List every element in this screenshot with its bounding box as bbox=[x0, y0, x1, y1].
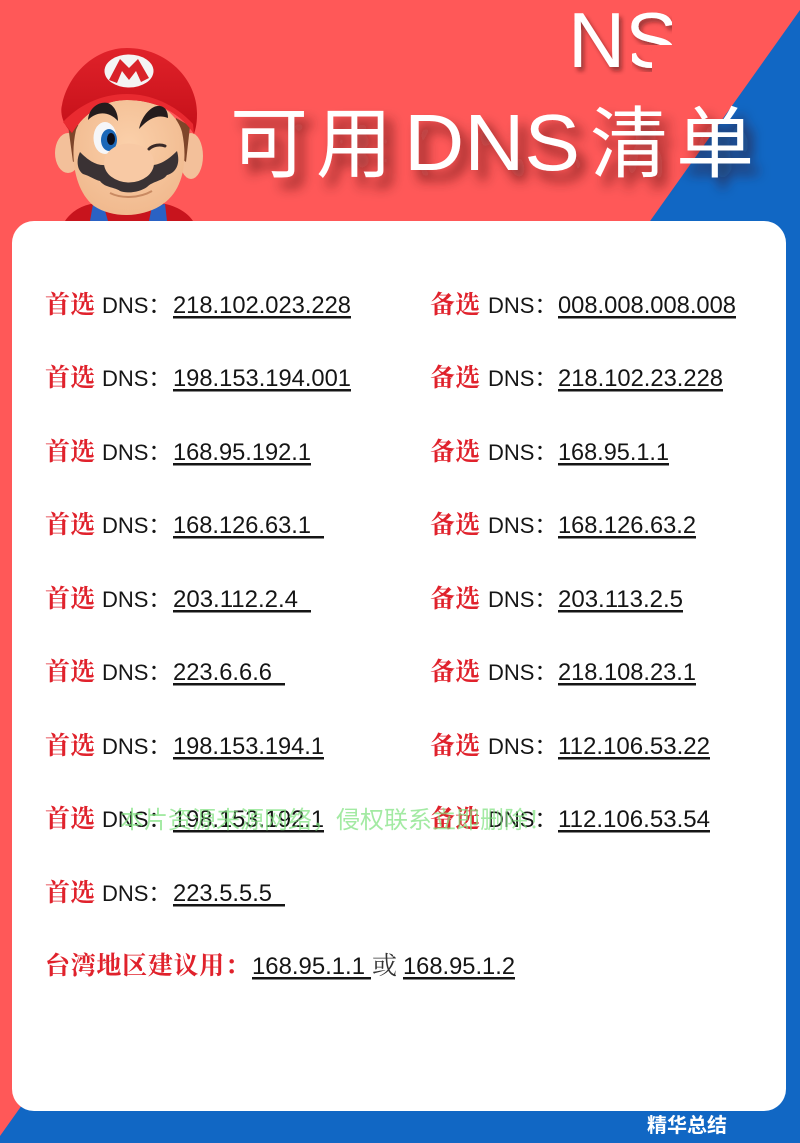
row 9: 223.5.5.5 bbox=[173, 880, 272, 907]
row 5 bbox=[45, 585, 683, 613]
row 2: 198.153.194.001 bbox=[173, 365, 351, 392]
Mario body bbox=[65, 203, 193, 221]
row 1: 备选 bbox=[430, 291, 480, 319]
row 5: 备选 bbox=[430, 585, 480, 613]
row 3: DNS： bbox=[102, 440, 170, 465]
row 8: 112.106.53.54 bbox=[558, 806, 710, 833]
row 3: 168.95.192.1 bbox=[173, 439, 311, 466]
row 8: DNS： bbox=[488, 807, 556, 832]
Mario eyebrows bbox=[88, 103, 168, 129]
row 1: 008.008.008.008 bbox=[558, 292, 736, 319]
Mario hat bbox=[61, 48, 197, 134]
watermark text: 本片资源来源网络，侵权联系立即删除！ bbox=[120, 807, 552, 834]
row 5: 203.113.2.5 bbox=[558, 586, 683, 613]
panel: DNS list card bbox=[12, 221, 786, 1111]
row 6: 首选 bbox=[45, 658, 95, 686]
row 8: 首选 bbox=[45, 805, 95, 833]
row 6: 218.108.23.1 bbox=[558, 659, 696, 686]
Mario nose bbox=[104, 144, 154, 182]
row 10: Taiwan region bbox=[45, 952, 515, 980]
row 1: DNS： bbox=[488, 293, 556, 318]
heading: 可用DNS清单: 可 bbox=[230, 100, 308, 188]
hat logo bbox=[104, 54, 154, 88]
row 10: Taiwan region: 168.95.1.2 bbox=[403, 953, 515, 980]
row 2: 首选 bbox=[45, 364, 95, 392]
icon: Mario character bbox=[55, 48, 203, 221]
heading: 可用DNS清单: DNS bbox=[404, 98, 580, 187]
row 6: 223.6.6.6 bbox=[173, 659, 272, 686]
row 10: Taiwan region: 168.95.1.1 bbox=[252, 953, 365, 980]
row 7 bbox=[45, 732, 710, 760]
footer label: 精华总结 bbox=[647, 1114, 727, 1137]
row 2: DNS： bbox=[102, 366, 170, 391]
row 8: 备选 bbox=[430, 805, 480, 833]
row 5: 首选 bbox=[45, 585, 95, 613]
row 6: DNS： bbox=[102, 660, 170, 685]
row 10: Taiwan region: 台湾地区建议用： bbox=[45, 952, 250, 980]
row 3: 首选 bbox=[45, 438, 95, 466]
row 5: 203.112.2.4 bbox=[173, 586, 298, 613]
Mario open eye bbox=[94, 122, 117, 154]
row 3: 备选 bbox=[430, 438, 480, 466]
row 1: 首选 bbox=[45, 291, 95, 319]
heading: 可用DNS清单: 单 bbox=[676, 100, 754, 188]
row 4 bbox=[45, 511, 696, 539]
row 6: DNS： bbox=[488, 660, 556, 685]
row 7: 首选 bbox=[45, 732, 95, 760]
row 8: DNS： bbox=[102, 807, 170, 832]
row 7: 备选 bbox=[430, 732, 480, 760]
Mario ears bbox=[55, 133, 203, 179]
Mario overall straps bbox=[90, 204, 167, 221]
row 1: 218.102.023.228 bbox=[173, 292, 351, 319]
row 3: DNS： bbox=[488, 440, 556, 465]
row 8 bbox=[45, 805, 710, 833]
row 8: 198.153.192.1 bbox=[173, 806, 324, 833]
row 3 bbox=[45, 438, 669, 466]
row 1: DNS： bbox=[102, 293, 170, 318]
Mario mustache bbox=[78, 151, 178, 192]
row 7: 112.106.53.22 bbox=[558, 733, 710, 760]
row 4: 备选 bbox=[430, 511, 480, 539]
row 9: DNS： bbox=[102, 881, 170, 906]
row 5: DNS： bbox=[102, 587, 170, 612]
row 7: 198.153.194.1 bbox=[173, 733, 324, 760]
row 6 bbox=[45, 658, 696, 686]
row 7: DNS： bbox=[102, 734, 170, 759]
row 1 bbox=[45, 291, 736, 319]
row 3: 168.95.1.1 bbox=[558, 439, 669, 466]
row 6: 备选 bbox=[430, 658, 480, 686]
Mario face bbox=[73, 98, 184, 215]
row 4: DNS： bbox=[488, 513, 556, 538]
row 4: 168.126.63.1 bbox=[173, 512, 311, 539]
row 4: DNS： bbox=[102, 513, 170, 538]
row 10: Taiwan region: 或 bbox=[372, 952, 397, 980]
Mario mouth bbox=[110, 191, 152, 197]
row 9: 首选 bbox=[45, 879, 95, 907]
row 4: 168.126.63.2 bbox=[558, 512, 696, 539]
row 2: 218.102.23.228 bbox=[558, 365, 723, 392]
row 9 bbox=[45, 879, 285, 907]
Mario winking eye bbox=[149, 145, 165, 149]
row 2: 备选 bbox=[430, 364, 480, 392]
Mario hair bbox=[68, 118, 190, 162]
row 7: DNS： bbox=[488, 734, 556, 759]
row 4: 首选 bbox=[45, 511, 95, 539]
row 5: DNS： bbox=[488, 587, 556, 612]
row 2: DNS： bbox=[488, 366, 556, 391]
heading: 可用DNS清单: 清 bbox=[590, 100, 668, 188]
heading: 可用DNS清单 bbox=[230, 98, 754, 188]
row 2 bbox=[45, 364, 723, 392]
heading: 可用DNS清单: 用 bbox=[316, 100, 392, 188]
